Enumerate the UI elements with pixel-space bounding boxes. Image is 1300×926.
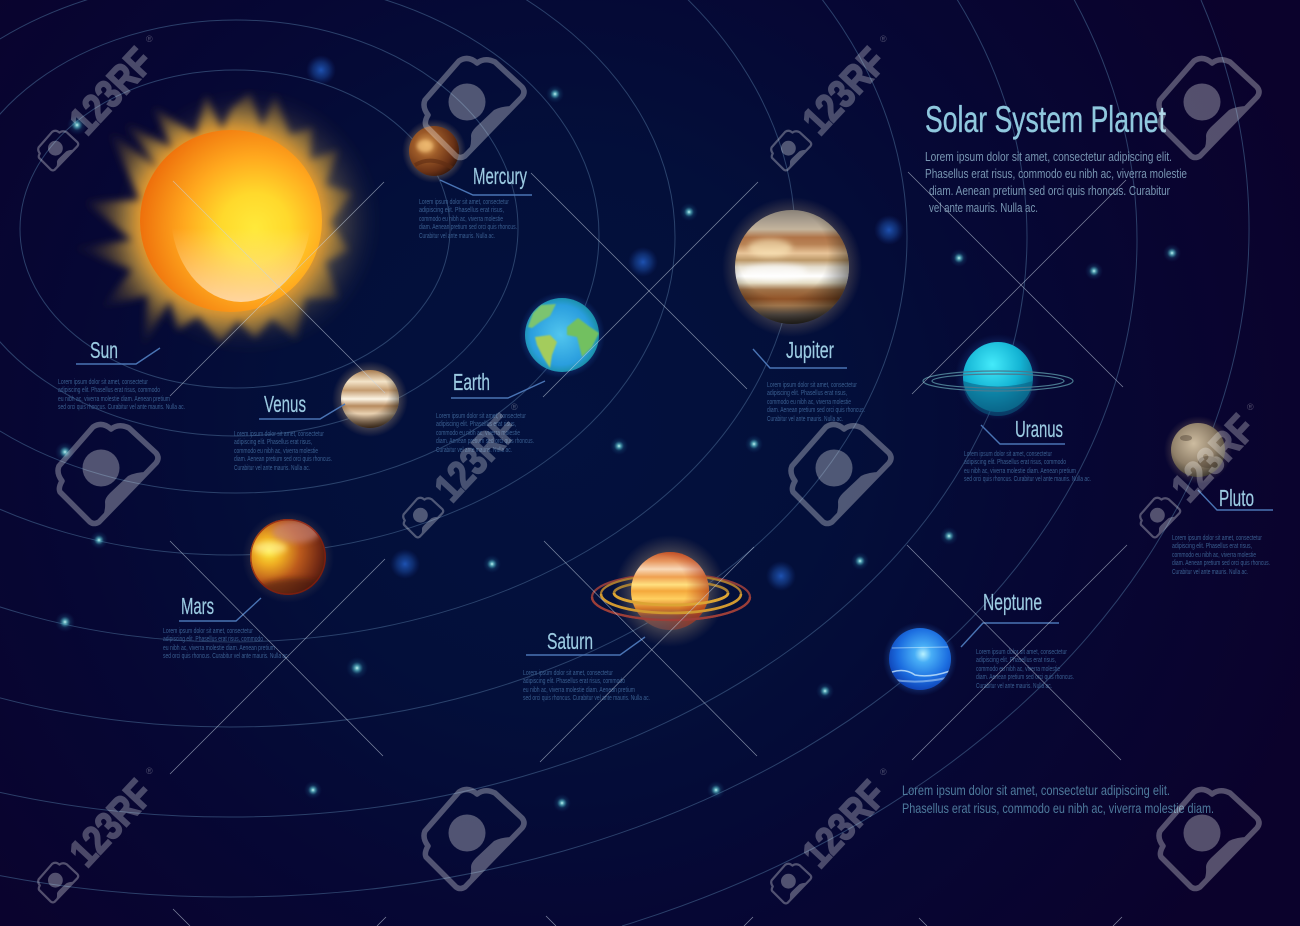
label: Earth: Lorem ipsum dolor sit amet, consectetur xyxy=(436,411,526,420)
label: Mercury xyxy=(419,163,532,240)
label: Jupiter: adipiscing elit. Phasellus erat risus, xyxy=(767,388,847,397)
label: Venus: Lorem ipsum dolor sit amet, consectetur xyxy=(234,429,324,438)
label: Neptune xyxy=(961,589,1074,690)
label: Sun: eu nibh ac, viverra molestie diam. Aenean pretium xyxy=(58,394,170,403)
label: Uranus: sed orci quis rhoncus. Curabitur vel ante mauris. Nulla ac. xyxy=(964,474,1091,483)
stars xyxy=(55,55,1181,812)
label: Uranus: Uranus xyxy=(1015,416,1063,442)
label: Venus: Venus xyxy=(264,391,306,417)
watermark overlay: ® xyxy=(511,402,518,412)
label: Neptune: Curabitur vel ante mauris. Nulla ac. xyxy=(976,681,1052,690)
label: Mercury: adipiscing elit. Phasellus erat risus, xyxy=(419,205,504,214)
label: Earth: Earth xyxy=(453,369,490,395)
label: Saturn: Saturn xyxy=(547,628,593,654)
icon: Mars xyxy=(246,514,330,600)
footer text xyxy=(902,782,1214,816)
label: Jupiter: Curabitur vel ante mauris. Nulla ac. xyxy=(767,414,843,423)
label: Saturn: adipiscing elit. Phasellus erat risus, commodo xyxy=(523,676,625,685)
watermark overlay: 123RF xyxy=(1163,407,1264,510)
label: Uranus: Lorem ipsum dolor sit amet, consectetur xyxy=(964,449,1052,458)
label: Saturn: sed orci quis rhoncus. Curabitur vel ante mauris. Nulla ac. xyxy=(523,693,650,702)
icon: Pluto xyxy=(1166,418,1230,482)
watermark overlay: ® xyxy=(880,767,887,777)
label: Mercury: diam. Aenean pretium sed orci quis rhoncus. xyxy=(419,222,517,231)
title: Solar System Planet xyxy=(925,99,1167,140)
icon: Neptune xyxy=(883,622,957,696)
icon: Mercury xyxy=(402,119,466,183)
watermark overlay: 123RF xyxy=(426,407,527,510)
icon: Saturn xyxy=(592,535,750,647)
label: Saturn: eu nibh ac, viverra molestie diam. Aenean pretium xyxy=(523,685,635,694)
label: Jupiter: Lorem ipsum dolor sit amet, consectetur xyxy=(767,380,857,389)
watermark overlay: ® xyxy=(880,34,887,44)
label: Earth xyxy=(436,369,545,454)
watermark overlay: ® xyxy=(146,766,153,776)
label: Uranus xyxy=(964,416,1091,483)
label: Saturn: Lorem ipsum dolor sit amet, consectetur xyxy=(523,668,613,677)
label: Uranus: adipiscing elit. Phasellus erat risus, commodo xyxy=(964,457,1066,466)
label: Jupiter xyxy=(753,337,865,423)
label: Saturn xyxy=(523,628,650,702)
label: Venus xyxy=(234,391,345,472)
label: Neptune: Lorem ipsum dolor sit amet, consectetur xyxy=(976,647,1067,656)
label: Earth: commodo eu nibh ac, viverra molestie xyxy=(436,428,520,437)
intro text: diam. Aenean pretium sed orci quis rhoncus. Curabitur xyxy=(929,183,1171,198)
label: Neptune: adipiscing elit. Phasellus erat risus, xyxy=(976,655,1056,664)
label: Sun: Lorem ipsum dolor sit amet, consectetur xyxy=(58,377,148,386)
label: Jupiter: diam. Aenean pretium sed orci quis rhoncus. xyxy=(767,405,865,414)
label: Sun: sed orci quis rhoncus. Curabitur vel ante mauris. Nulla ac. xyxy=(58,402,185,411)
label: Mars: Mars xyxy=(181,593,214,619)
label: Pluto: Pluto xyxy=(1219,485,1254,511)
intro text: Lorem ipsum dolor sit amet, consectetur adipiscing elit. xyxy=(925,149,1172,164)
label: Neptune: diam. Aenean pretium sed orci quis rhoncus. xyxy=(976,672,1074,681)
icon: sun xyxy=(75,93,376,349)
label: Mercury: commodo eu nibh ac, viverra molestie xyxy=(419,214,503,223)
label: Sun: Sun xyxy=(90,337,118,363)
watermark overlay: ® xyxy=(1247,402,1254,412)
intro text: Phasellus erat risus, commodo eu nibh ac, viverra molestie xyxy=(925,166,1187,181)
label: Earth: Curabitur vel ante mauris. Nulla ac. xyxy=(436,445,512,454)
label: Pluto: commodo eu nibh ac, viverra molestie xyxy=(1172,550,1256,559)
label: Earth: adipiscing elit. Phasellus erat risus, xyxy=(436,419,516,428)
icon: Jupiter xyxy=(722,197,862,337)
label: Mars: adipiscing elit. Phasellus erat risus, commodo xyxy=(163,634,263,643)
label: Mercury: Curabitur vel ante mauris. Nulla ac. xyxy=(419,231,495,240)
watermark overlay: ® xyxy=(146,34,153,44)
label: Venus: commodo eu nibh ac, viverra molestie xyxy=(234,446,318,455)
watermark overlay: 123RF xyxy=(61,772,162,875)
icon: Uranus xyxy=(923,334,1073,420)
label: Mercury: Mercury xyxy=(473,163,527,189)
label: Neptune: commodo eu nibh ac, viverra molestie xyxy=(976,664,1060,673)
label: Mars: sed orci quis rhoncus. Curabitur vel ante mauris. Nulla ac. xyxy=(163,651,289,660)
watermark overlay: 123RF xyxy=(61,40,162,143)
label: Pluto: Curabitur vel ante mauris. Nulla ac. xyxy=(1172,567,1248,576)
icon: Earth xyxy=(519,292,605,378)
label: Pluto xyxy=(1172,485,1273,576)
footer text: Phasellus erat risus, commodo eu nibh ac, viverra molestie diam. xyxy=(902,800,1214,816)
icon: Venus xyxy=(332,361,408,437)
label: Earth: diam. Aenean pretium sed orci quis rhoncus. xyxy=(436,436,534,445)
label: Venus: diam. Aenean pretium sed orci quis rhoncus. xyxy=(234,454,332,463)
watermark overlay: 123RF xyxy=(794,773,895,876)
intro text: vel ante mauris. Nulla ac. xyxy=(929,200,1038,215)
footer text: Lorem ipsum dolor sit amet, consectetur adipiscing elit. xyxy=(902,782,1170,798)
label: Neptune: Neptune xyxy=(983,589,1042,615)
label: Jupiter: commodo eu nibh ac, viverra molestie xyxy=(767,397,851,406)
label: Mars xyxy=(163,593,289,660)
label: Pluto: adipiscing elit. Phasellus erat risus, xyxy=(1172,541,1252,550)
label: Mars: eu nibh ac, viverra molestie diam. Aenean pretium xyxy=(163,643,275,652)
label: Sun: adipiscing elit. Phasellus erat risus, commodo xyxy=(58,385,160,394)
label: Sun xyxy=(58,337,185,411)
label: Jupiter: Jupiter xyxy=(786,337,834,363)
label: Venus: adipiscing elit. Phasellus erat risus, xyxy=(234,437,312,446)
label: Mars: Lorem ipsum dolor sit amet, consectetur xyxy=(163,626,253,635)
label: Venus: Curabitur vel ante mauris. Nulla ac. xyxy=(234,463,310,472)
label: Uranus: eu nibh ac, viverra molestie diam. Aenean pretium xyxy=(964,466,1076,475)
watermark overlay: 123RF xyxy=(794,40,895,143)
intro text xyxy=(925,149,1187,215)
label: Mercury: Lorem ipsum dolor sit amet, consectetur xyxy=(419,197,509,206)
